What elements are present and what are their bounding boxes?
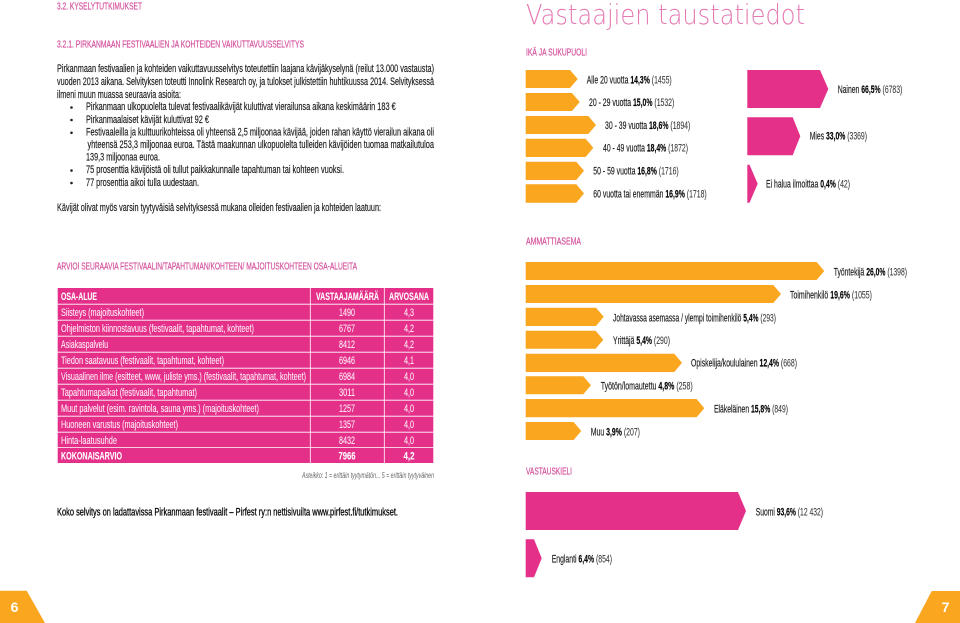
table heading: ARVIOI SEURAAVIA FESTIVAALIN/TAPAHTUMAN/KOHTEEN/ MAJOITUSKOHTEEN OSA-ALUEITA <box>57 260 357 272</box>
table row: Hinta-laatusuhde: 8432 <box>339 435 355 447</box>
table row: Huoneen varustus <box>61 419 414 431</box>
page number 7: 7 <box>942 599 950 615</box>
table row: Kokonaisarvio: 4,2 <box>404 450 414 462</box>
table row: Ohjelmisto: 4,2 <box>404 323 414 335</box>
page number 6 <box>0 591 45 623</box>
bar: entrepreneur <box>526 331 670 349</box>
left page intro <box>57 0 435 214</box>
bar: 50-59 <box>526 162 679 180</box>
bullet list: Pirkanmaan ulkopuolelta tulevat festivaalikävijät kuluttivat vierailunsa aikana keskimäärin 183 € <box>86 101 396 113</box>
bullet list: Pirkanmaalaiset kävijät kuluttivat 92 € <box>86 114 209 126</box>
body paragraph: ilmeni muun muassa seuraavia asioita: <box>57 89 181 101</box>
bar: 30-39: 30 - 39 vuotta 18,6% (1894) <box>605 120 690 132</box>
bar: 60 and over: 60 vuotta tai enemmän 16,9% (1718) <box>593 188 707 200</box>
table row: Siisteys: Siisteys (majoituskohteet) <box>61 307 144 319</box>
bullet list: 77 prosenttia aikoi tulla uudestaan. <box>86 177 199 189</box>
bar: 30-39 <box>526 116 690 134</box>
bar: other <box>526 422 640 440</box>
table header row: VASTAAJAMÄÄRÄ <box>316 290 379 303</box>
ratings table <box>58 288 433 463</box>
table row: Tapahtumapaikat: 4,0 <box>404 387 414 399</box>
table row: Hinta-laatusuhde: Hinta-laatusuhde <box>61 435 117 447</box>
bar: unemployed: Työtön/lomautettu 4,8% (258) <box>601 380 693 392</box>
table row: Tiedon saatavuus: 4,1 <box>404 355 414 367</box>
table row: Siisteys: 1490 <box>339 307 355 319</box>
occupation bar chart <box>526 262 907 440</box>
page number 6: 6 <box>11 599 19 615</box>
table row: Siisteys <box>61 307 414 319</box>
bullet list: 75 prosenttia kävijöistä oli tullut paikkakunnalle tapahtuman tai kohteen vuoksi. <box>86 164 344 176</box>
table row: Muut palvelut: Muut palvelut (esim. ravintola, sauna yms.) (majoituskohteet) <box>61 403 259 415</box>
bar: not disclosed <box>747 165 850 203</box>
bar: worker <box>526 262 907 280</box>
bar: under 20 <box>526 70 672 88</box>
bar: Finnish: Suomi 93,6% (12 432) <box>756 506 823 518</box>
heading: response language: VASTAUSKIELI <box>526 466 572 478</box>
bar: 20-29 <box>526 93 674 111</box>
table row: Kokonaisarvio: 7966 <box>338 450 356 462</box>
bar: female <box>747 70 902 108</box>
bullet list: yhteensä 253,3 miljoonaa euroa. Tästä maakunnan ulkopuolelta tulleiden kävijöiden tuomaa matkailutuloa <box>88 139 435 151</box>
closing sentence: Kävijät olivat myös varsin tyytyväisiä selvityksessä mukana olleiden festivaalien ja kohteiden laatuun: <box>57 202 381 214</box>
body paragraph: Pirkanmaan festivaalien ja kohteiden vaikuttavuusselvitys toteutettiin laajana kävijäkyselynä (reilut 13.000 vastausta) <box>57 63 434 75</box>
bar: entrepreneur: Yrittäjä 5,4% (290) <box>613 335 670 347</box>
bar: worker: Työntekijä 26,0% (1398) <box>834 266 907 278</box>
bullet list: Festivaaleilla ja kulttuurikohteissa oli yhteensä 2,5 miljoonaa kävijää, joiden rahan käyttö vierailun aikana oli <box>86 126 434 138</box>
bar: unemployed <box>526 376 693 394</box>
table row: Muut palvelut: 4,0 <box>404 403 414 415</box>
table row: Asiakaspalvelu: 8412 <box>339 339 355 351</box>
table row: Tiedon saatavuus <box>61 355 414 367</box>
bar: 40-49: 40 - 49 vuotta 18,4% (1872) <box>603 142 688 154</box>
table header row: OSA-ALUE <box>61 291 97 303</box>
table row: Siisteys: 4,3 <box>404 307 414 319</box>
bar: 60 and over <box>526 184 707 203</box>
language bar chart <box>526 492 823 577</box>
bar: English: Englanti 6,4% (854) <box>552 554 612 566</box>
table row: Kokonaisarvio: KOKONAISARVIO <box>61 450 122 462</box>
table row: Tapahtumapaikat: 3011 <box>339 387 355 399</box>
bar: retired: Eläkeläinen 15,8% (849) <box>714 404 788 416</box>
bar: other: Muu 3,9% (207) <box>591 426 640 438</box>
bar: under 20: Alle 20 vuotta 14,3% (1455) <box>587 74 672 86</box>
table row: Hinta-laatusuhde: 4,0 <box>404 435 414 447</box>
table row: Asiakaspalvelu <box>61 339 414 351</box>
bar: female: Nainen 66,5% (6783) <box>838 84 902 96</box>
page number 7 <box>915 591 960 623</box>
bar: English <box>526 539 612 577</box>
table row: Tapahtumapaikat <box>61 387 414 399</box>
table row: Huoneen varustus: 4,0 <box>404 419 414 431</box>
bar: clerical <box>526 285 872 303</box>
bar: Finnish <box>526 492 823 530</box>
table row: Ohjelmisto: Ohjelmiston kiinnostavuus (festivaalit, tapahtumat, kohteet) <box>61 323 254 335</box>
bar: male <box>747 117 867 155</box>
bar: 40-49 <box>526 139 688 157</box>
table row: Tapahtumapaikat: Tapahtumapaikat (festivaalit, tapahtumat) <box>61 387 197 399</box>
bar: 20-29: 20 - 29 vuotta 15,0% (1532) <box>589 97 674 109</box>
bar: clerical: Toimihenkilö 19,6% (1055) <box>790 290 872 302</box>
body paragraph <box>57 63 435 101</box>
table row: Visuaalinen ilme: Visuaalinen ilme (esitteet, www, juliste yms.) (festivaalit, tapahtumat, kohteet) <box>61 371 306 383</box>
table row: Huoneen varustus: Huoneen varustus (majoituskohteet) <box>61 419 178 431</box>
table row: Ohjelmisto: 6767 <box>339 323 355 335</box>
table row: Huoneen varustus: 1357 <box>339 419 355 431</box>
bar: retired <box>526 399 788 417</box>
heading: age and gender: IKÄ JA SUKUPUOLI <box>526 46 587 58</box>
table row: Hinta-laatusuhde <box>61 435 414 447</box>
report link note: Koko selvitys on ladattavissa Pirkanmaan festivaalit – Pirfest ry:n nettisivuilta www.pirfest.fi/tutkimukset. <box>57 506 398 518</box>
bullet list <box>70 101 435 189</box>
gender bar chart <box>747 70 902 203</box>
table row: Asiakaspalvelu: Asiakaspalvelu <box>61 339 108 351</box>
table header row: ARVOSANA <box>389 291 429 303</box>
table row: Asiakaspalvelu: 4,2 <box>404 339 414 351</box>
scale note: Asteikko: 1 = erittäin tyytymätön... 5 = erittäin tyytyväinen <box>301 471 434 480</box>
section heading: 3.2. KYSELYTUTKIMUKSET <box>57 0 142 12</box>
age bar chart <box>526 70 707 203</box>
table row: Kokonaisarvio <box>61 450 414 462</box>
bar: not disclosed: Ei halua ilmoittaa 0,4% (42) <box>766 178 850 190</box>
table row: Visuaalinen ilme: 4,0 <box>404 371 414 383</box>
bar: male: Mies 33,0% (3369) <box>810 130 867 142</box>
bullet list: 139,3 miljoonaa euroa. <box>86 152 160 164</box>
body paragraph: vuoden 2013 aikana. Selvityksen toteutti Innolink Research oy, ja tulokset julkistettiin huhtikuussa 2014. Selvityksessä <box>57 76 435 88</box>
table header row <box>61 290 429 303</box>
bar: student: Opiskelija/koululainen 12,4% (668) <box>691 358 797 370</box>
table row: Tiedon saatavuus: 6946 <box>339 355 355 367</box>
table row: Muut palvelut: 1257 <box>339 403 355 415</box>
bar: student <box>526 354 797 372</box>
heading: occupation: AMMATTIASEMA <box>526 236 581 248</box>
subsection heading: 3.2.1. PIRKANMAAN FESTIVAALIEN JA KOHTEIDEN VAIKUTTAVUUSSELVITYS <box>57 38 304 50</box>
table row: Tiedon saatavuus: Tiedon saatavuus (festivaalit, tapahtumat, kohteet) <box>61 355 224 367</box>
bar: 50-59: 50 - 59 vuotta 16,8% (1716) <box>593 166 679 178</box>
table row: Visuaalinen ilme: 6984 <box>339 371 355 383</box>
bar: management <box>526 308 776 326</box>
bar: management: Johtavassa asemassa / ylempi toimihenkilö 5,4% (293) <box>613 312 776 324</box>
